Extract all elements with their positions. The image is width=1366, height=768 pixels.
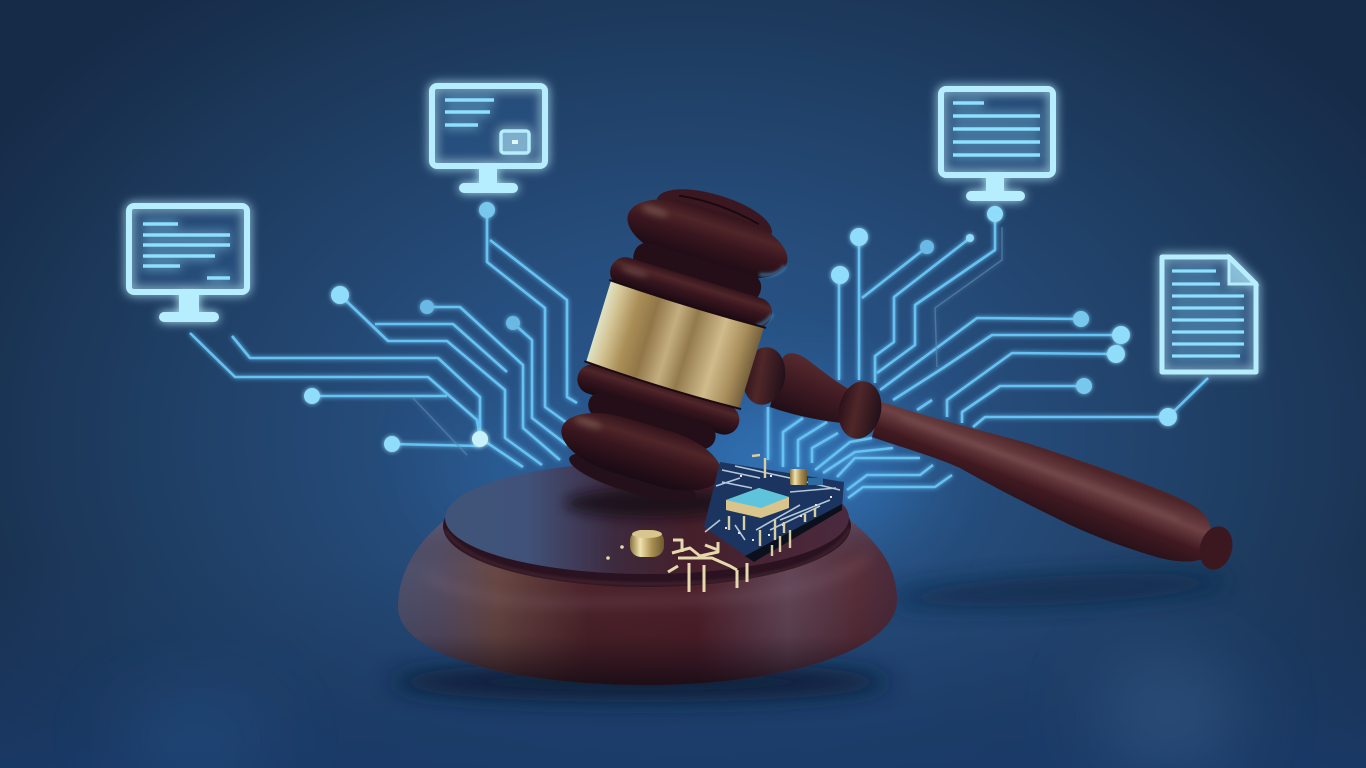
capacitor bbox=[790, 469, 823, 485]
block side bbox=[398, 520, 897, 685]
icon: monitor top left bbox=[432, 86, 545, 193]
block top bbox=[445, 462, 849, 574]
gavel contact shadow bbox=[565, 488, 735, 518]
board pads bbox=[725, 476, 832, 540]
chip bbox=[726, 488, 789, 518]
brass band bbox=[586, 280, 764, 410]
circuit board bbox=[704, 455, 844, 562]
right circuit nodes bbox=[831, 206, 1177, 426]
crown bottom bbox=[565, 444, 700, 511]
icon: monitor left bbox=[129, 206, 247, 322]
handle taper bbox=[770, 353, 854, 423]
head highlights bbox=[574, 203, 670, 432]
gavel sound block bbox=[398, 462, 897, 685]
crown groove bbox=[678, 193, 761, 224]
upper lobe bbox=[620, 187, 795, 291]
decorative dots beside nut bbox=[606, 545, 624, 560]
handle knob bbox=[833, 377, 887, 443]
block lip bbox=[443, 465, 851, 587]
gold nut bbox=[630, 530, 664, 557]
handle highlight bbox=[900, 418, 1180, 520]
floor shadow and reflection of gavel bbox=[390, 567, 1230, 702]
upper neck bbox=[630, 240, 764, 305]
left circuit nodes bbox=[304, 202, 520, 452]
gold traces on block bbox=[668, 540, 747, 592]
right circuit lines bbox=[768, 215, 1208, 498]
gavel head bbox=[550, 171, 801, 517]
crown top bbox=[650, 178, 778, 255]
block side shading bbox=[398, 520, 897, 685]
board edge bbox=[745, 504, 842, 562]
upper flange bbox=[606, 253, 776, 331]
block shoulder sheen bbox=[425, 555, 870, 603]
blue rim reflections bbox=[745, 259, 787, 329]
band shadow lines bbox=[584, 280, 766, 411]
gold pins bbox=[729, 455, 815, 556]
lower flange bbox=[574, 361, 743, 438]
handle shaft bbox=[872, 402, 1212, 562]
icon: monitor top right bbox=[941, 89, 1053, 201]
handle collar bbox=[738, 344, 790, 408]
block lip highlight bbox=[445, 528, 850, 584]
gavel handle bbox=[738, 344, 1237, 573]
handle end cap bbox=[1195, 523, 1237, 573]
icon: document bbox=[1162, 257, 1256, 372]
lower lobe bbox=[554, 401, 729, 503]
board traces bbox=[705, 466, 840, 540]
board plate bbox=[704, 462, 844, 560]
lower neck bbox=[585, 389, 719, 452]
left circuit lines bbox=[190, 210, 577, 467]
